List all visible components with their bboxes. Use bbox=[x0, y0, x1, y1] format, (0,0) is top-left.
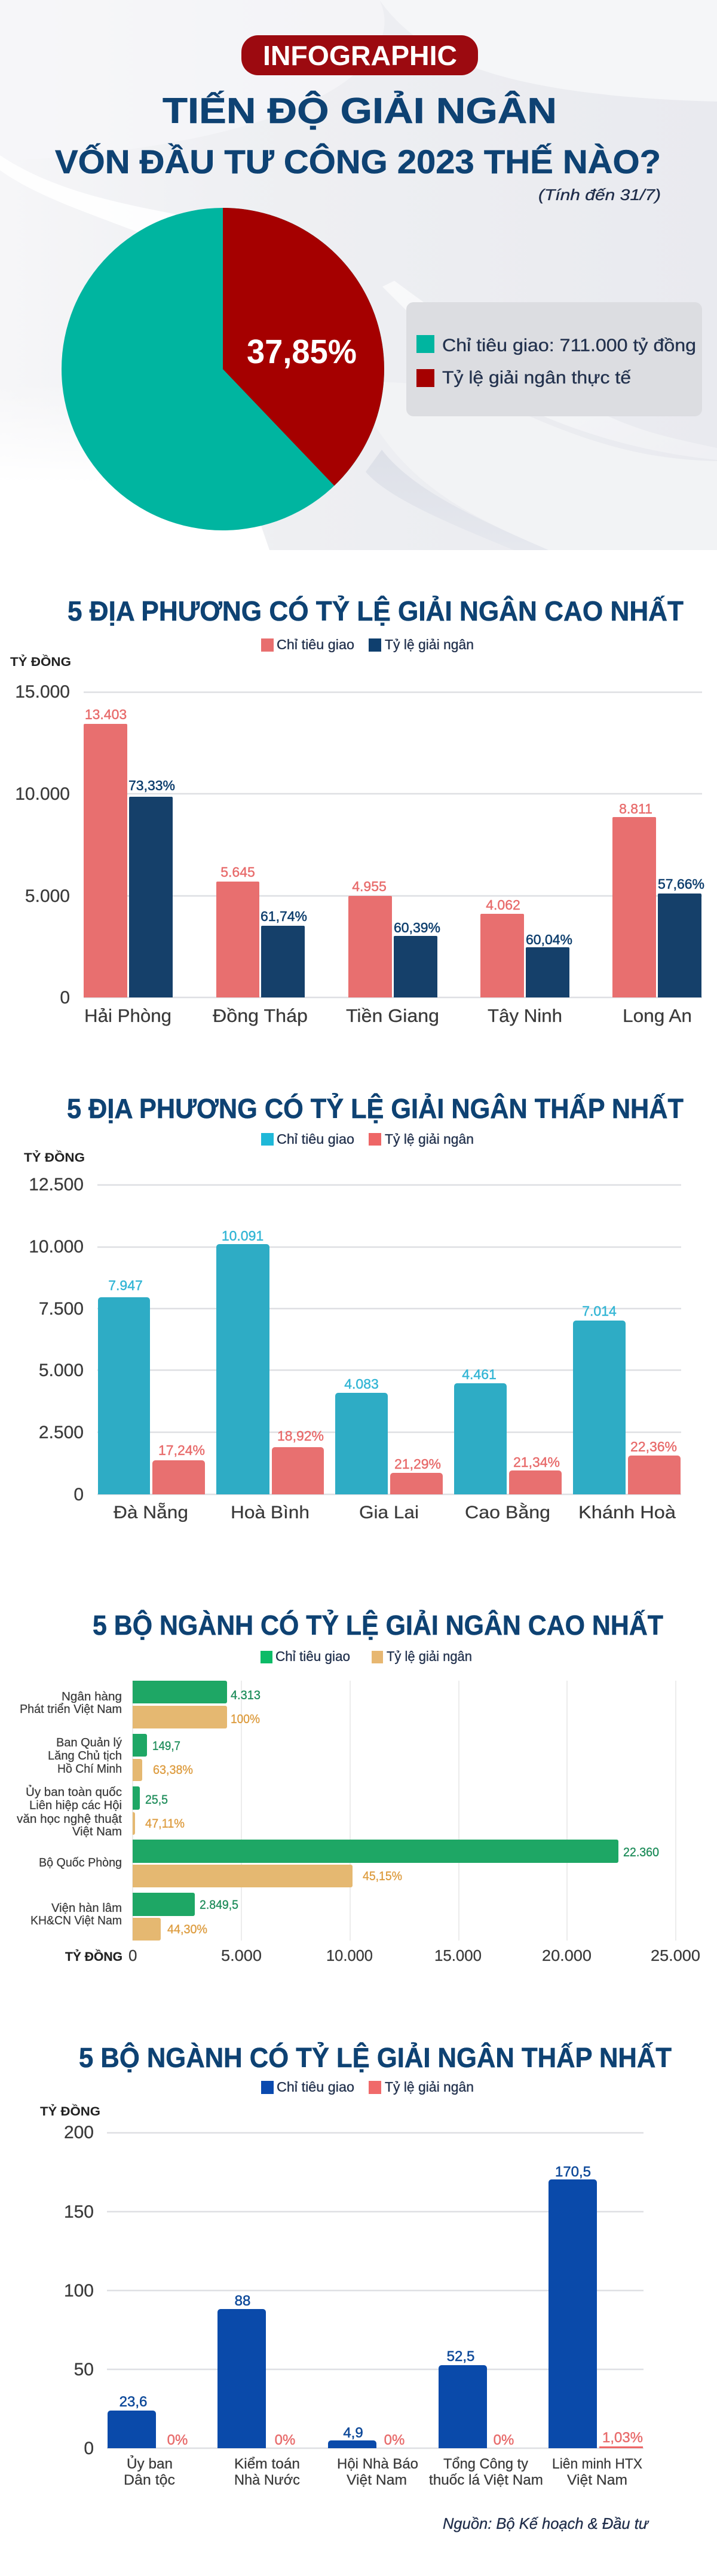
category labels: Ủy ban toàn quốc bbox=[26, 1785, 122, 1799]
y axis: 50 bbox=[74, 2360, 94, 2380]
value labels: 0% bbox=[494, 2432, 514, 2448]
heading: 5 ĐỊA PHƯƠNG CÓ TỶ LỆ GIẢI NGÂN THẤP NHẤT bbox=[67, 1093, 684, 1124]
category labels bbox=[124, 2455, 642, 2488]
category labels bbox=[84, 1005, 692, 1026]
pie legend: Tỷ lệ giải ngân thực tế bbox=[442, 368, 631, 388]
value labels: 47,11% bbox=[145, 1817, 185, 1831]
value labels: 18,92% bbox=[277, 1428, 324, 1444]
category labels: thuốc lá Việt Nam bbox=[429, 2472, 543, 2488]
legend: Tỷ lệ giải ngân bbox=[385, 1131, 474, 1147]
y axis: 15.000 bbox=[15, 682, 70, 702]
category labels: Cao Bằng bbox=[465, 1503, 550, 1522]
category labels: Bộ Quốc Phòng bbox=[39, 1856, 122, 1869]
value labels: 25,5 bbox=[145, 1793, 168, 1807]
x axis: 15.000 bbox=[434, 1946, 482, 1964]
y axis: 12.500 bbox=[29, 1175, 84, 1195]
category labels: Đà Nẵng bbox=[114, 1503, 188, 1522]
y axis: 2.500 bbox=[39, 1423, 84, 1442]
legend: Chỉ tiêu giao bbox=[277, 1131, 354, 1147]
legend bbox=[261, 2079, 474, 2095]
legend bbox=[261, 1131, 474, 1147]
category labels: Long An bbox=[623, 1005, 692, 1026]
value labels: 63,38% bbox=[153, 1763, 193, 1777]
y axis: 7.500 bbox=[39, 1299, 84, 1319]
category labels: Hồ Chí Minh bbox=[57, 1763, 122, 1776]
category labels: Tây Ninh bbox=[488, 1005, 562, 1026]
value labels: 0% bbox=[275, 2432, 295, 2448]
value labels: 4.461 bbox=[462, 1367, 497, 1382]
category labels: Nhà Nước bbox=[234, 2472, 300, 2488]
value labels: 7.947 bbox=[108, 1278, 143, 1293]
category labels: Hội Nhà Báo bbox=[337, 2456, 418, 2472]
value labels: 13.403 bbox=[85, 707, 127, 722]
category labels: Đồng Tháp bbox=[213, 1005, 308, 1026]
y axis: 10.000 bbox=[15, 784, 70, 804]
category labels: Ban Quản lý bbox=[56, 1736, 122, 1749]
value labels: 45,15% bbox=[363, 1869, 402, 1883]
legend: Chỉ tiêu giao bbox=[275, 1648, 350, 1664]
legend: Tỷ lệ giải ngân bbox=[385, 637, 474, 652]
bar chart bbox=[84, 724, 701, 1001]
category labels: Tiền Giang bbox=[346, 1005, 439, 1026]
category labels: Hải Phòng bbox=[84, 1005, 171, 1026]
badge: INFOGRAPHIC: INFOGRAPHIC bbox=[263, 40, 457, 71]
value labels: 21,29% bbox=[394, 1456, 441, 1472]
value labels: 0% bbox=[384, 2432, 405, 2448]
value labels: 4,9 bbox=[343, 2425, 363, 2441]
legend: Chỉ tiêu giao bbox=[277, 637, 354, 652]
value labels: 10.091 bbox=[222, 1228, 263, 1244]
value labels: 22.360 bbox=[623, 1846, 659, 1859]
value labels: 4.313 bbox=[231, 1688, 261, 1702]
value labels bbox=[85, 707, 704, 947]
category labels: Ngân hàng bbox=[62, 1690, 122, 1703]
pie chart: disbursement share bbox=[62, 208, 384, 530]
x axis: TỶ ĐỒNG bbox=[65, 1949, 122, 1964]
value labels: 4.955 bbox=[352, 879, 387, 894]
value labels: 21,34% bbox=[513, 1454, 560, 1470]
value labels: 61,74% bbox=[261, 908, 307, 924]
category labels bbox=[114, 1503, 676, 1522]
legend: Chỉ tiêu giao bbox=[277, 2079, 354, 2095]
y axis: 0 bbox=[84, 2439, 94, 2458]
y axis: 200 bbox=[64, 2123, 94, 2142]
category labels: KH&CN Việt Nam bbox=[30, 1914, 122, 1927]
value labels: 60,04% bbox=[526, 932, 572, 947]
category labels: Phát triển Việt Nam bbox=[20, 1703, 122, 1716]
heading: 5 BỘ NGÀNH CÓ TỶ LỆ GIẢI NGÂN THẤP NHẤT bbox=[79, 2042, 672, 2073]
value labels: 100% bbox=[231, 1712, 260, 1726]
category labels bbox=[17, 1690, 122, 1927]
unit label: TỶ ĐỒNG bbox=[10, 655, 71, 669]
value labels: 52,5 bbox=[447, 2348, 474, 2365]
category labels: Tổng Công ty bbox=[443, 2456, 528, 2472]
pie legend: Chỉ tiêu giao: 711.000 tỷ đồng bbox=[442, 336, 696, 355]
y axis: 5.000 bbox=[25, 886, 70, 906]
legend bbox=[261, 637, 474, 652]
background: header swoosh panel bbox=[0, 0, 717, 550]
value labels: 149,7 bbox=[152, 1739, 180, 1753]
category labels: văn học nghệ thuật bbox=[17, 1813, 122, 1826]
category labels: Dân tộc bbox=[124, 2472, 175, 2488]
title: TIẾN ĐỘ GIẢI NGÂN bbox=[163, 91, 557, 131]
value labels: 17,24% bbox=[158, 1442, 205, 1458]
y axis: 0 bbox=[73, 1485, 84, 1505]
x axis bbox=[65, 1946, 700, 1964]
y axis: 0 bbox=[60, 988, 70, 1008]
source note: Nguồn: Bộ Kế hoạch & Đầu tư bbox=[443, 2514, 649, 2532]
y axis: 150 bbox=[64, 2202, 94, 2222]
vertical grid bbox=[133, 1681, 676, 1941]
category labels: Khánh Hoà bbox=[578, 1503, 676, 1522]
heading: 5 BỘ NGÀNH CÓ TỶ LỆ GIẢI NGÂN CAO NHẤT bbox=[93, 1610, 663, 1641]
title bbox=[55, 91, 661, 180]
x axis: 10.000 bbox=[326, 1946, 373, 1964]
legend: Tỷ lệ giải ngân bbox=[385, 2079, 474, 2095]
category labels: Hoà Bình bbox=[231, 1503, 310, 1522]
category labels: Việt Nam bbox=[72, 1825, 122, 1838]
panel: top 5 localities bbox=[10, 595, 704, 1026]
y axis bbox=[15, 682, 702, 1008]
legend: Tỷ lệ giải ngân bbox=[387, 1648, 472, 1664]
value labels: 23,6 bbox=[120, 2394, 147, 2410]
value labels: 0% bbox=[167, 2432, 188, 2448]
value labels: 4.062 bbox=[486, 897, 520, 913]
unit label: TỶ ĐỒNG bbox=[24, 1150, 85, 1165]
date note: (Tính đến 31/7) bbox=[538, 186, 661, 204]
value labels: 44,30% bbox=[167, 1923, 207, 1936]
value labels: 5.645 bbox=[220, 864, 255, 880]
y axis: 100 bbox=[64, 2281, 94, 2301]
heading: 5 ĐỊA PHƯƠNG CÓ TỶ LỆ GIẢI NGÂN CAO NHẤT bbox=[68, 595, 684, 627]
y axis bbox=[64, 2123, 644, 2458]
category labels: Ủy ban bbox=[127, 2455, 173, 2472]
value labels: 88 bbox=[235, 2293, 250, 2309]
x axis: 5.000 bbox=[221, 1946, 262, 1964]
value labels: 170,5 bbox=[555, 2164, 591, 2180]
title: VỐN ĐẦU TƯ CÔNG 2023 THẾ NÀO? bbox=[55, 143, 661, 180]
y axis: 10.000 bbox=[29, 1237, 84, 1257]
value labels: 1,03% bbox=[602, 2430, 643, 2446]
badge: INFOGRAPHIC bbox=[241, 35, 478, 75]
value labels bbox=[108, 1228, 677, 1472]
unit label: TỶ ĐỒNG bbox=[40, 2104, 100, 2118]
category labels: Gia Lai bbox=[359, 1503, 419, 1522]
bar chart bbox=[108, 2179, 643, 2452]
y axis bbox=[29, 1175, 681, 1505]
value labels bbox=[145, 1688, 659, 1936]
value labels: 73,33% bbox=[128, 778, 175, 793]
value labels: 60,39% bbox=[394, 920, 440, 935]
x axis: 25.000 bbox=[651, 1946, 700, 1964]
x axis: 20.000 bbox=[542, 1946, 592, 1964]
x axis: 0 bbox=[128, 1946, 137, 1964]
panel: bottom 5 localities bbox=[24, 1093, 684, 1522]
category labels: Lăng Chủ tịch bbox=[48, 1749, 122, 1763]
category labels: Liên hiệp các Hội bbox=[29, 1799, 122, 1812]
bar chart bbox=[98, 1244, 681, 1498]
panel: top 5 ministries bbox=[17, 1610, 700, 1964]
bar chart bbox=[129, 1681, 618, 1941]
panel: bottom 5 ministries bbox=[40, 2042, 672, 2532]
legend bbox=[261, 1648, 472, 1664]
value labels: 2.849,5 bbox=[200, 1898, 238, 1912]
category labels: Việt Nam bbox=[347, 2472, 407, 2488]
value labels: 22,36% bbox=[630, 1439, 677, 1454]
pie chart: disbursement share: 37,85% bbox=[247, 333, 357, 371]
category labels: Liên minh HTX bbox=[552, 2456, 642, 2472]
category labels: Việt Nam bbox=[567, 2472, 627, 2488]
y axis: 5.000 bbox=[39, 1361, 84, 1380]
value labels bbox=[120, 2164, 643, 2448]
value labels: 7.014 bbox=[582, 1303, 617, 1319]
value labels: 4.083 bbox=[344, 1376, 379, 1392]
pie legend bbox=[406, 302, 702, 416]
category labels: Viện hàn lâm bbox=[51, 1902, 122, 1915]
value labels: 57,66% bbox=[658, 876, 704, 892]
value labels: 8.811 bbox=[619, 801, 652, 816]
category labels: Kiểm toán bbox=[234, 2456, 300, 2472]
